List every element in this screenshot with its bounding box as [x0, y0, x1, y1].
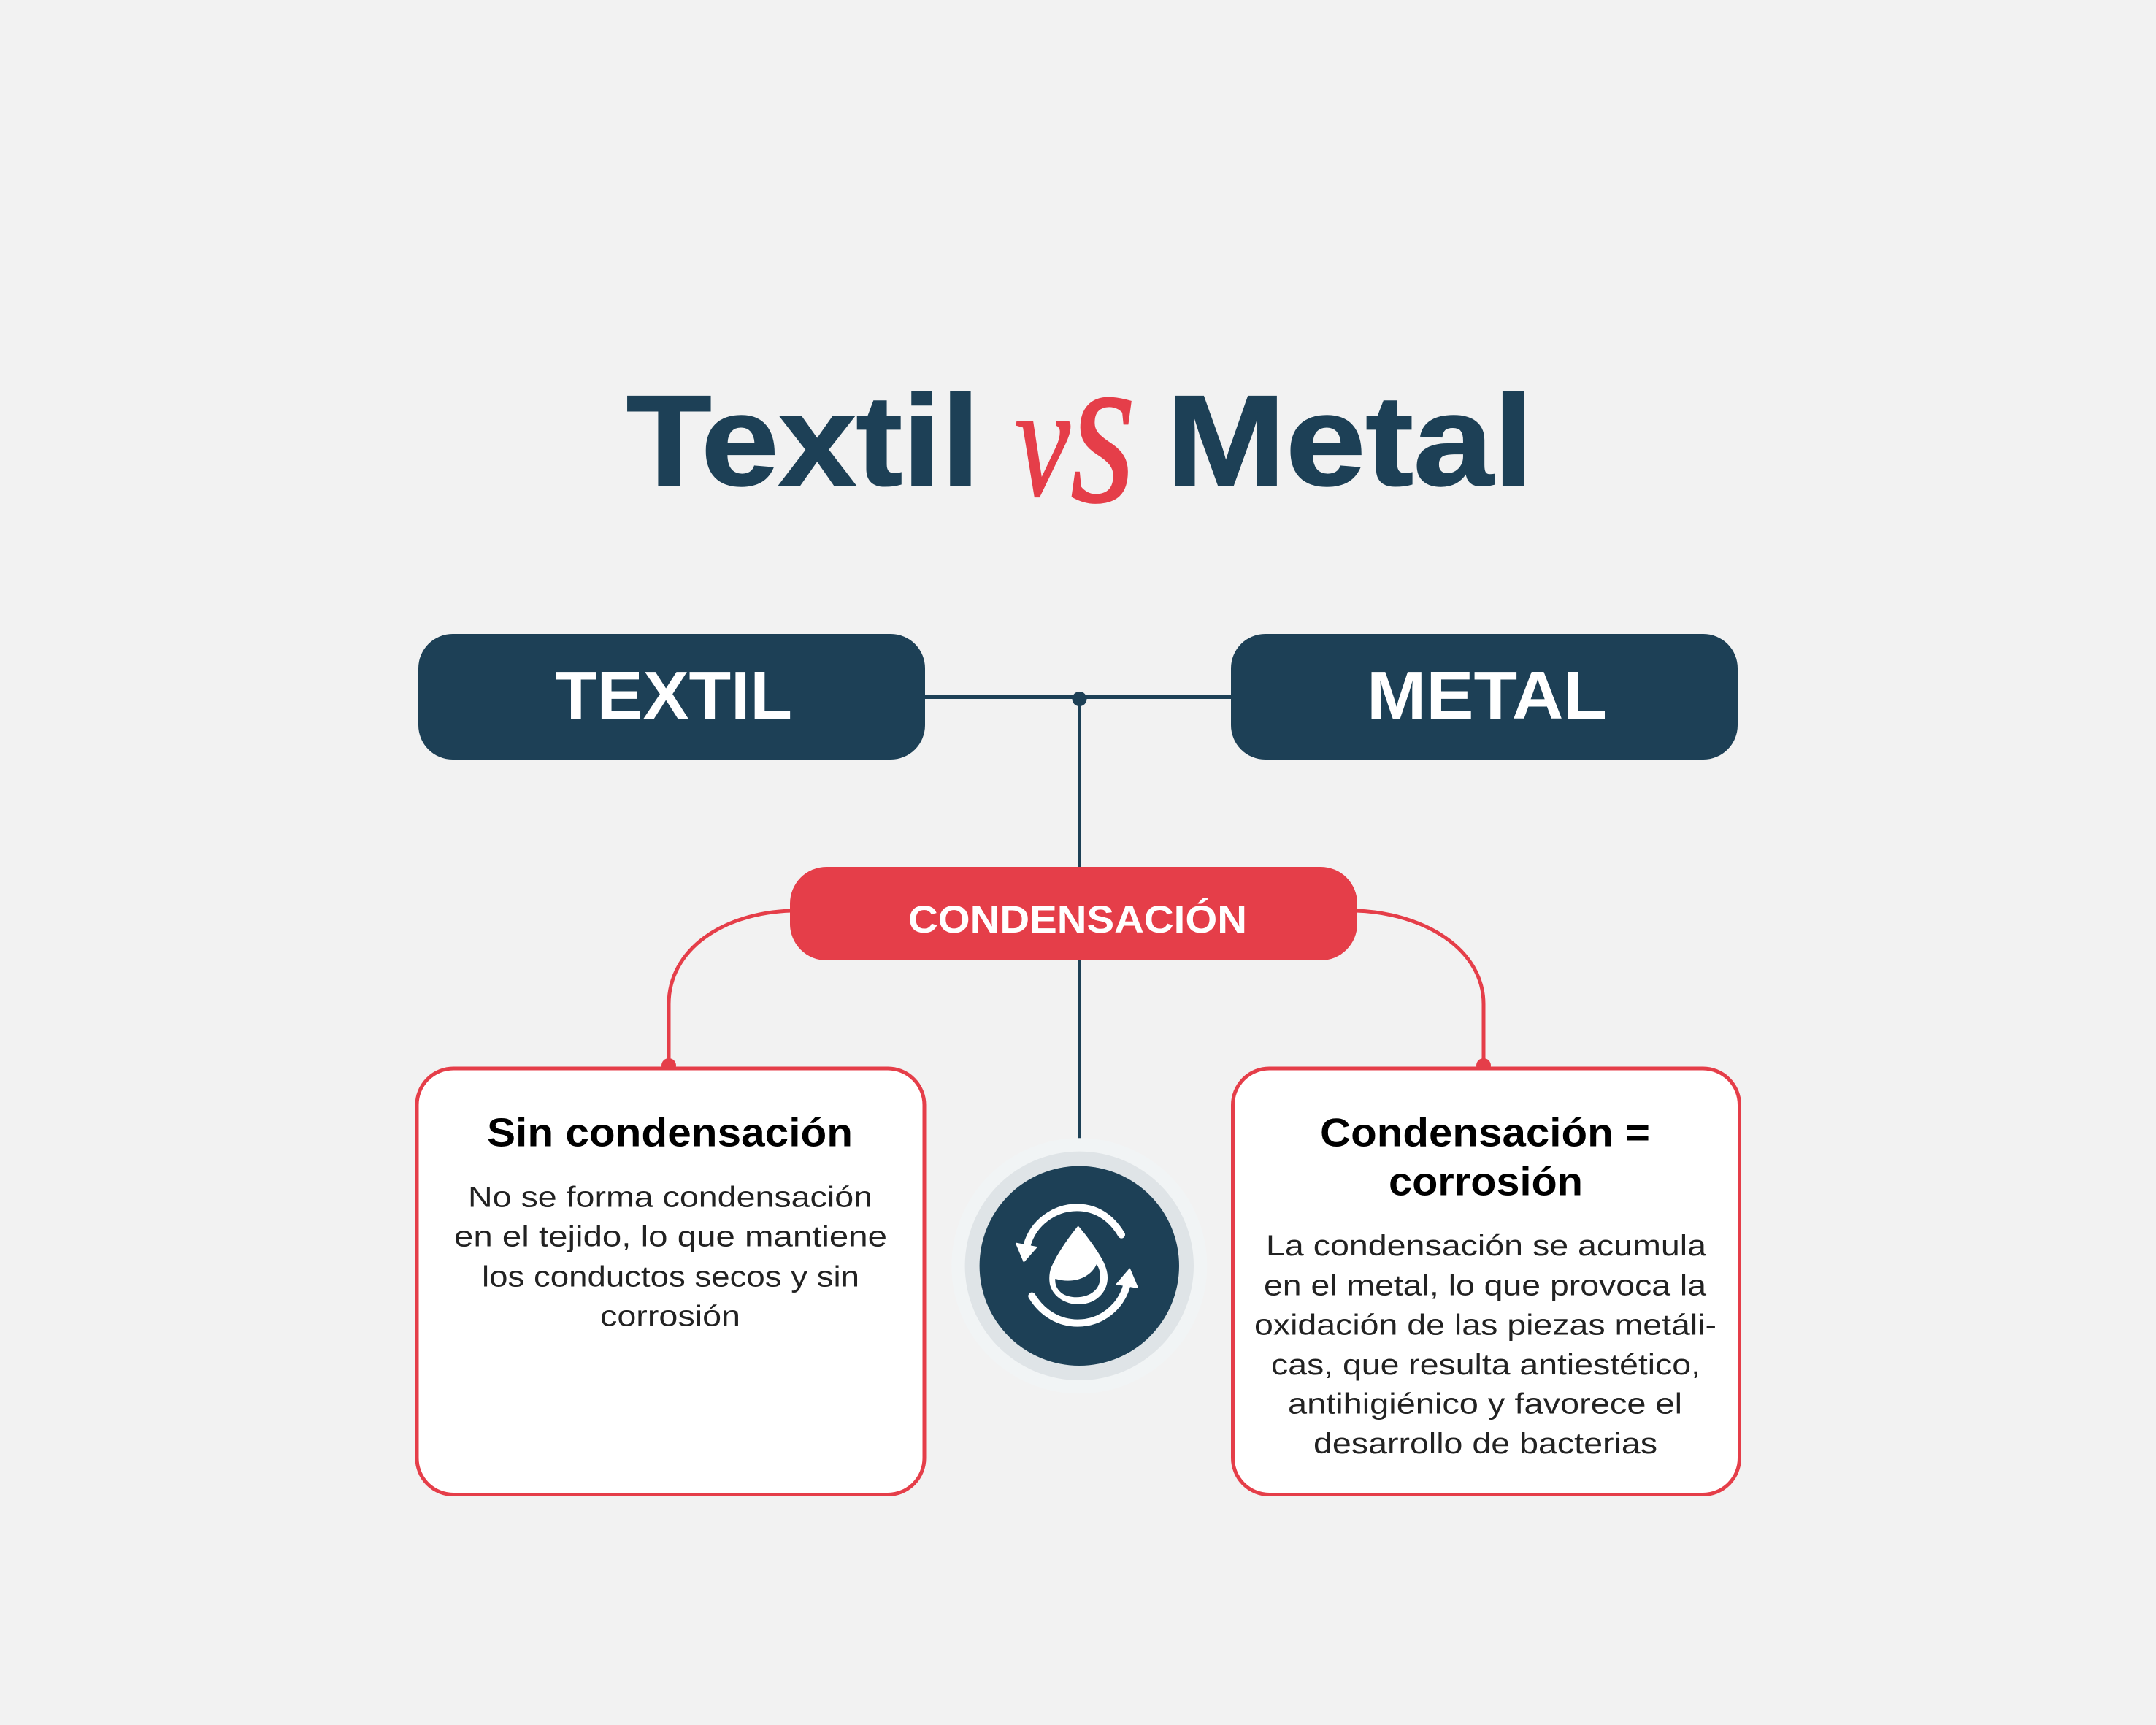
text block: textil description: en el tejido, lo que mantiene — [454, 1221, 887, 1253]
heading: condensación = corrosión: Condensación = — [1320, 1110, 1650, 1155]
text block: metal description: desarrollo de bacterias — [1313, 1428, 1657, 1460]
panel: metal card — [1232, 1068, 1739, 1494]
heading: condensación = corrosión: corrosión — [1389, 1158, 1583, 1204]
text block: metal description: antihigiénico y favorece el — [1288, 1388, 1682, 1420]
topic pill: condensación: CONDENSACIÓN — [908, 898, 1247, 941]
text block: textil description: corrosión — [600, 1300, 740, 1332]
text block: metal description: oxidación de las piezas metáli- — [1254, 1309, 1716, 1341]
text block: textil description: los conductos secos y sin — [482, 1261, 859, 1293]
text block: metal description: La condensación se acumula — [1266, 1230, 1707, 1262]
title: Textil — [626, 370, 980, 513]
text block: metal description: cas, que resulta antiestético, — [1271, 1349, 1700, 1381]
heading: condensación = corrosión — [1320, 1110, 1650, 1204]
connector: red branch to right card — [1356, 911, 1491, 1073]
title: Metal — [1166, 370, 1533, 513]
header: METAL — [1231, 634, 1738, 760]
text block: metal description: en el metal, lo que provoca la — [1264, 1269, 1707, 1301]
topic pill: condensación — [790, 867, 1357, 960]
text block: metal description — [1254, 1230, 1716, 1460]
header: TEXTIL: TEXTIL — [555, 657, 792, 733]
connector: red branch to left card — [661, 911, 791, 1073]
connector: header bar and central stem — [924, 692, 1232, 1139]
icon: water drop with cycle arrows — [951, 1138, 1207, 1393]
header: TEXTIL — [418, 634, 925, 760]
heading: sin condensación: Sin condensación — [487, 1110, 853, 1155]
title: s — [1070, 306, 1136, 548]
text block: textil description: No se forma condensación — [468, 1182, 872, 1214]
title: v — [1015, 352, 1086, 530]
text block: textil description — [454, 1182, 887, 1332]
header: METAL: METAL — [1367, 657, 1607, 733]
title — [626, 306, 1533, 548]
panel: textil card — [417, 1068, 924, 1494]
